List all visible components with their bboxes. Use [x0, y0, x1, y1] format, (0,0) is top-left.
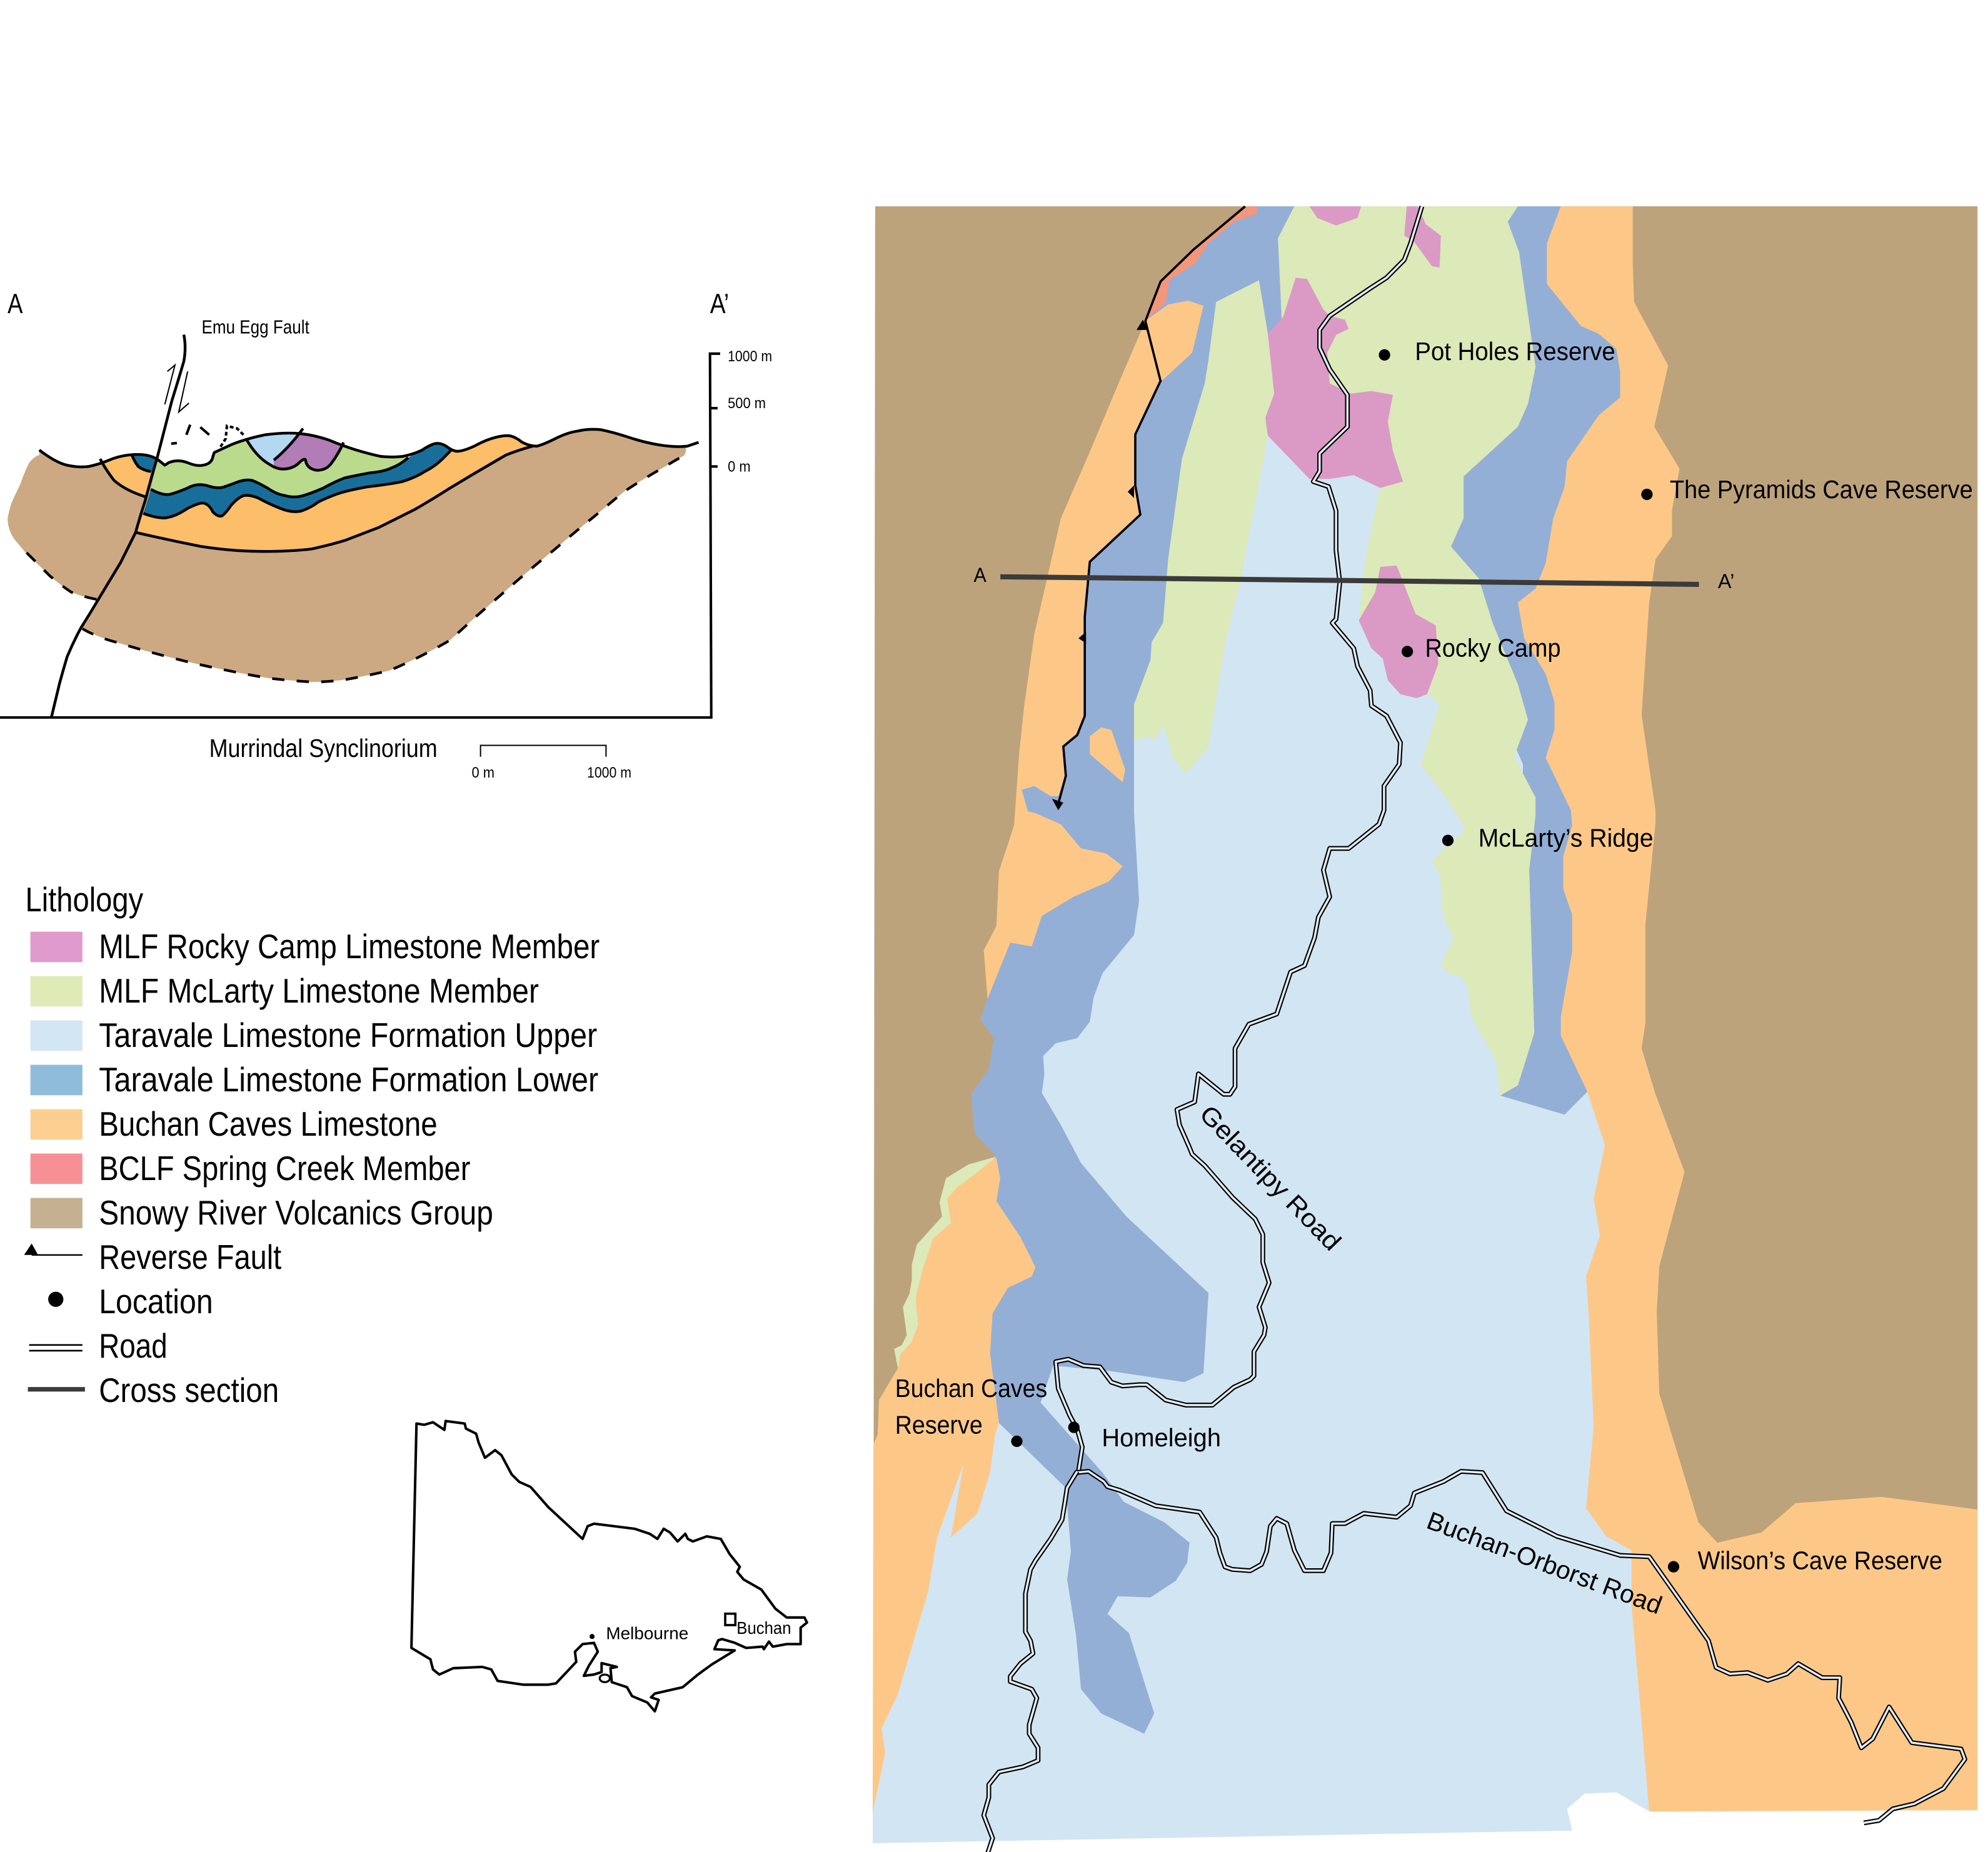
panel: geological map — [873, 206, 1977, 1852]
legend item: Snowy River: Snowy River Volcanics Group — [99, 1193, 493, 1232]
map labels: A — [974, 564, 986, 586]
section unit: Rocky Camp Member — [274, 433, 343, 470]
reverse fault line — [1052, 206, 1245, 810]
map labels: Reserve — [895, 1411, 983, 1439]
map labels: Gelantipy Road — [1194, 1099, 1347, 1256]
map unit: Buchan Caves Limestone island — [1090, 728, 1125, 782]
map labels: The Pyramids Cave Reserve — [1670, 475, 1973, 504]
map unit: Snowy River Volcanics east — [1633, 206, 1977, 1543]
road: south branch — [984, 1471, 1077, 1852]
map unit: Taravale Lower west — [942, 206, 1294, 1734]
section labels — [8, 289, 772, 763]
legend item: Reverse Fault: Reverse Fault — [99, 1238, 281, 1276]
map unit: Rocky Camp Member south — [1358, 566, 1438, 698]
section unit: Buchan Caves Limestone left block — [101, 455, 151, 497]
map unit: Rocky Camp Member top — [1310, 206, 1362, 226]
section unit: Taravale Upper — [246, 433, 301, 466]
map unit: McLarty Member southwest strip — [894, 1157, 997, 1368]
map labels: McLarty’s Ridge — [1478, 824, 1654, 853]
Port Phillip island — [600, 1674, 610, 1682]
map labels: Pot Holes Reserve — [1415, 337, 1615, 366]
road: Gelantipy Road — [1056, 206, 1422, 1471]
map labels: Homeleigh — [1102, 1423, 1221, 1452]
map labels: A’ — [1718, 570, 1734, 593]
cross section line A-A' — [1000, 577, 1699, 584]
section unit: McLarty Member — [151, 433, 408, 497]
section labels: A’ — [710, 289, 729, 319]
map unit: Buchan Caves Limestone west upper — [967, 301, 1203, 999]
map labels: Buchan-Orborst Road — [1423, 1506, 1666, 1619]
scale bar — [471, 746, 631, 781]
section labels: A — [8, 289, 23, 319]
legend item: Buchan Caves: Buchan Caves Limestone — [99, 1104, 438, 1143]
section labels: Emu Egg Fault — [201, 316, 309, 338]
map labels: Wilson’s Cave Reserve — [1698, 1546, 1942, 1575]
Emu Egg Fault line — [51, 334, 185, 718]
fault motion half arrows — [165, 365, 189, 412]
legend item: Location: Location — [99, 1282, 213, 1321]
legend item: Rocky Camp: MLF Rocky Camp Limestone Member — [99, 927, 600, 966]
legend item: Reverse Fault — [24, 1238, 281, 1276]
map unit: Buchan Caves Limestone east — [1518, 206, 1977, 1811]
legend item: Taravale Upper: Taravale Limestone Formation Upper — [99, 1016, 597, 1054]
section frame and height axis — [0, 354, 720, 718]
map labels: Rocky Camp — [1425, 634, 1561, 663]
scale bar: 1000 m — [587, 764, 631, 781]
map geometry — [873, 206, 1977, 1852]
road: Buchan-Orbost Road — [1076, 1471, 1965, 1823]
legend item: Taravale Lower: Taravale Limestone Formation Lower — [99, 1060, 598, 1099]
map labels — [895, 337, 1973, 1619]
legend item: McLarty: MLF McLarty Limestone Member — [99, 971, 539, 1010]
panel: cross section — [0, 289, 772, 781]
map unit: McLarty Member main — [1278, 206, 1535, 1096]
map unit: Taravale Lower east — [1435, 206, 1637, 1114]
section labels: 1000 m — [728, 348, 772, 365]
location dots — [1011, 349, 1679, 1573]
map unit: Taravale Limestone Formation Upper base — [873, 206, 1977, 1843]
Buchan marker and label: Buchan — [736, 1618, 791, 1638]
legend item: Cross section: Cross section — [99, 1371, 279, 1409]
map unit: Snowy River Volcanics west — [874, 206, 1245, 1443]
map unit: Rocky Camp Member main — [1265, 278, 1403, 488]
section labels: Murrindal Synclinorium — [209, 734, 438, 763]
inset map: Victoria — [411, 1421, 807, 1711]
map unit: Buchan Caves Limestone west lower — [873, 1158, 1035, 1813]
Victoria outline — [411, 1421, 807, 1711]
Buchan marker and label — [725, 1614, 791, 1638]
section unit: Snowy River Volcanics — [8, 429, 686, 682]
Melbourne marker and label: Melbourne — [606, 1623, 688, 1643]
legend item: Road: Road — [99, 1326, 168, 1365]
legend item: BCLF Spring Creek: BCLF Spring Creek Member — [99, 1149, 470, 1188]
scale bar: 0 m — [471, 764, 494, 781]
dashed base contact — [27, 456, 682, 682]
section labels: 500 m — [728, 395, 766, 412]
section unit: Buchan Caves Limestone right block — [136, 436, 533, 551]
section unit: Taravale Lower left block — [132, 454, 157, 473]
section unit: Taravale Lower — [143, 443, 451, 518]
map unit: BCLF Spring Creek Member — [1145, 206, 1258, 321]
map labels: Buchan Caves — [895, 1374, 1047, 1403]
section contact lines — [39, 428, 698, 551]
eroded fold dashed lines — [171, 424, 243, 449]
panel: legend — [24, 880, 600, 1409]
section labels: 0 m — [728, 458, 751, 475]
map unit: McLarty Member west strip — [1134, 280, 1274, 773]
legend item: Location — [48, 1282, 213, 1321]
legend title: Lithology — [26, 880, 144, 919]
map unit: Rocky Camp Member upper right — [1404, 206, 1441, 268]
